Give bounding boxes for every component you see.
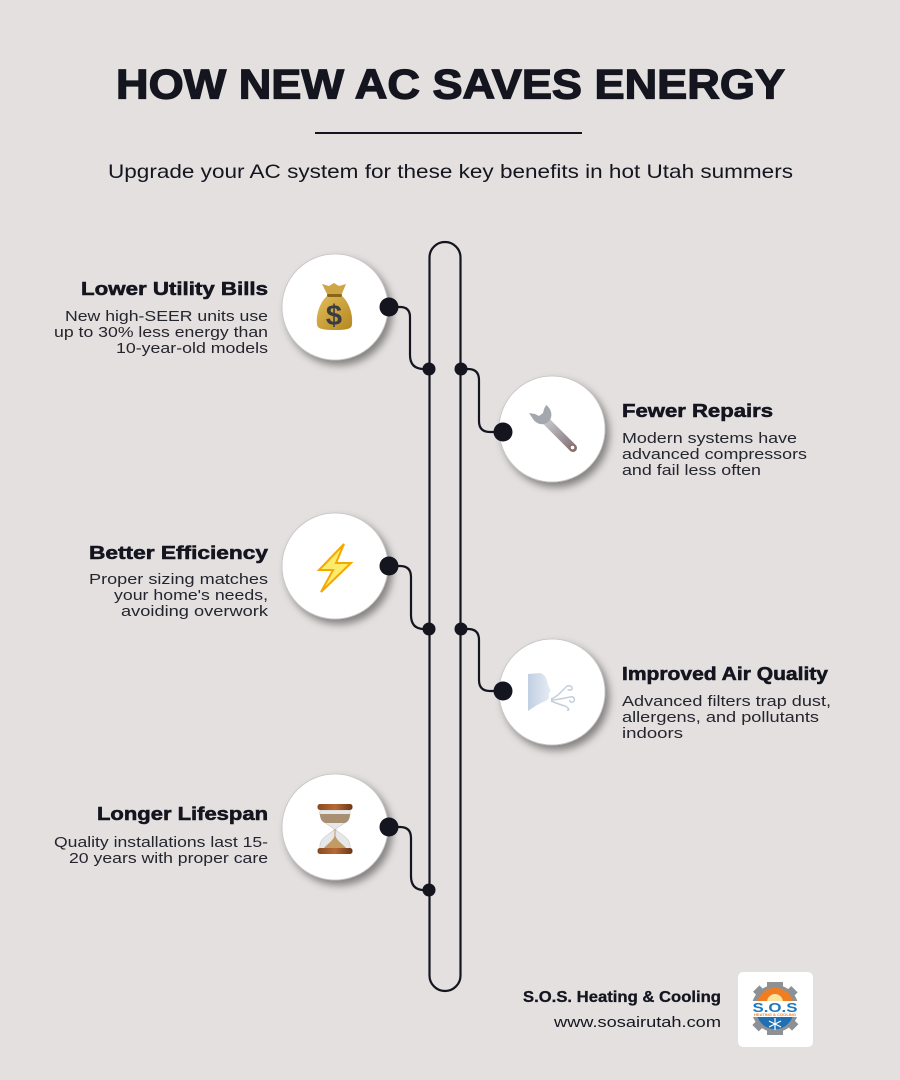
circle: improved air quality <box>499 639 605 745</box>
icon: wrench <box>529 405 575 450</box>
heading: better efficiency: Better Efficiency <box>89 543 268 563</box>
timeline node <box>422 884 436 896</box>
text: improved air quality description: allergens, and pollutants <box>622 710 819 726</box>
circle: lower utility bills <box>282 254 388 360</box>
timeline node <box>454 362 468 376</box>
panel: improved air quality <box>454 622 831 745</box>
heading: improved air quality: Improved Air Quality <box>622 664 828 684</box>
text: fewer repairs description: advanced compressors <box>622 447 807 463</box>
heading: lower utility bills: Lower Utility Bills <box>81 279 268 299</box>
connector dot <box>494 422 512 442</box>
connector: lower utility bills <box>389 307 429 369</box>
text: improved air quality description: Advanced filters trap dust, <box>622 694 831 710</box>
text: better efficiency description <box>89 572 269 620</box>
heading: fewer repairs: Fewer Repairs <box>622 401 773 421</box>
panel: longer lifespan <box>54 774 436 896</box>
icon: lightning bolt <box>319 544 351 592</box>
company name: S.O.S. Heating & Cooling <box>523 989 721 1006</box>
connector dot <box>380 818 398 836</box>
icon: hourglass <box>318 804 352 854</box>
connector: fewer repairs <box>461 369 503 432</box>
circle: better efficiency <box>282 513 388 619</box>
panel: lower utility bills <box>54 254 436 376</box>
text: improved air quality description: indoors <box>622 726 683 742</box>
connector dot <box>494 682 512 700</box>
title underline <box>315 132 582 134</box>
timeline node <box>422 362 436 376</box>
snowflake <box>769 1018 781 1030</box>
connector: longer lifespan <box>389 827 429 890</box>
logo: HEATING & COOLING <box>754 1012 796 1017</box>
text: lower utility bills description: 10-year-old models <box>116 341 268 357</box>
circle: fewer repairs <box>499 376 605 482</box>
text: lower utility bills description <box>54 309 268 357</box>
text: improved air quality description <box>622 694 831 742</box>
text: longer lifespan description: 20 years with proper care <box>69 851 268 867</box>
text: better efficiency description: your home's needs, <box>114 588 268 604</box>
text: longer lifespan description <box>54 835 268 867</box>
subtitle: Upgrade your AC system for these key benefits in hot Utah summers <box>108 161 793 183</box>
logo: S.O.S <box>752 1000 798 1015</box>
connector: better efficiency <box>389 566 429 629</box>
central pipe timeline <box>430 242 460 991</box>
panel: fewer repairs <box>454 362 807 482</box>
text: longer lifespan description: Quality installations last 15- <box>54 835 268 851</box>
text: better efficiency description: avoiding overwork <box>121 604 269 620</box>
text: fewer repairs description: and fail less often <box>622 463 761 479</box>
timeline node <box>422 622 436 636</box>
text: better efficiency description: Proper sizing matches <box>89 572 268 588</box>
text: fewer repairs description: Modern systems have <box>622 431 797 447</box>
icon: face blowing wind <box>528 673 574 711</box>
company website: www.sosairutah.com <box>553 1014 721 1031</box>
icon: money bag: $ <box>326 300 342 332</box>
connector: improved air quality <box>461 629 503 691</box>
connector dot <box>380 298 398 316</box>
title: HOW NEW AC SAVES ENERGY <box>116 60 785 108</box>
timeline node <box>454 622 468 636</box>
heading: longer lifespan: Longer Lifespan <box>97 804 268 824</box>
circle: longer lifespan <box>282 774 388 880</box>
panel: better efficiency <box>89 513 436 636</box>
text: fewer repairs description <box>622 431 807 479</box>
text: lower utility bills description: New high-SEER units use <box>65 309 268 325</box>
text: lower utility bills description: up to 30% less energy than <box>54 325 268 341</box>
logo <box>738 972 813 1047</box>
icon: money bag <box>317 283 352 332</box>
connector dot <box>380 556 398 576</box>
